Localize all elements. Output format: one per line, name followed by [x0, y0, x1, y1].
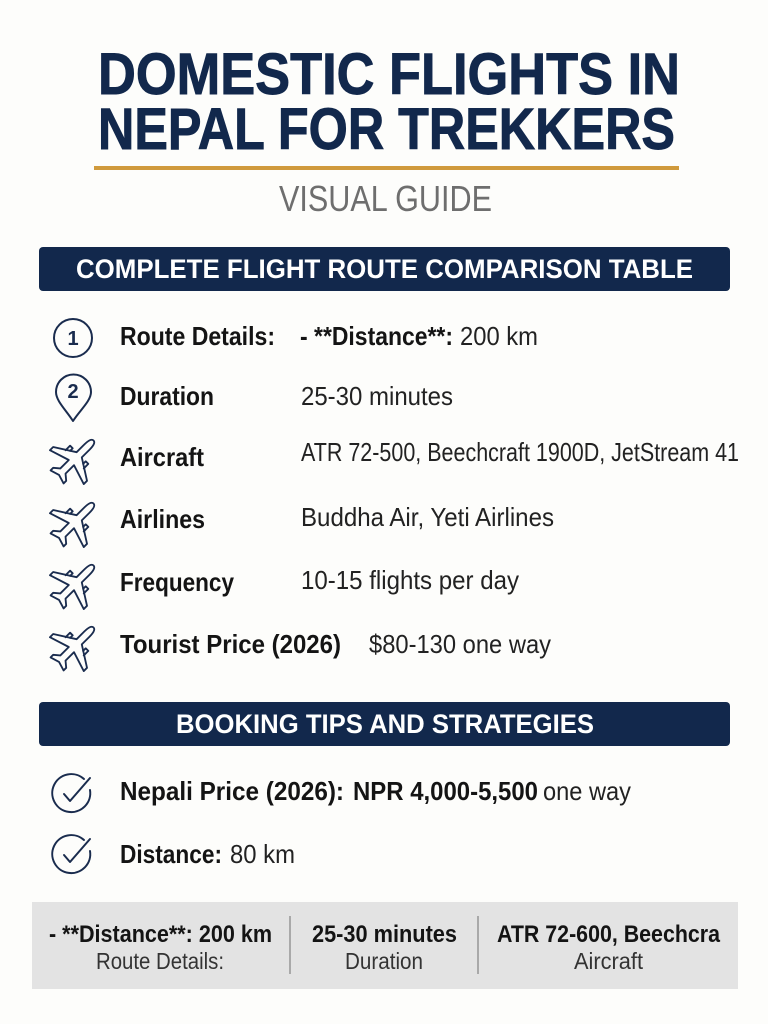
row: route details: 200 km — [460, 321, 538, 351]
icon: check circle — [52, 774, 90, 812]
icon: check circle — [52, 835, 90, 873]
section banner: booking tips: BOOKING TIPS AND STRATEGIES — [176, 709, 594, 739]
row: distance — [52, 835, 295, 873]
title: DOMESTIC FLIGHTS IN — [98, 42, 680, 107]
row: airlines — [40, 487, 554, 557]
stat: aircraft: ATR 72-600, Beechcra — [497, 921, 721, 948]
icon: numbered map pin 2 — [56, 374, 91, 421]
row: frequency — [40, 549, 519, 619]
row: tourist price: $80-130 one way — [369, 629, 551, 659]
row: aircraft — [40, 424, 739, 494]
row: nepali price: one way — [543, 776, 631, 806]
title: NEPAL FOR TREKKERS — [98, 97, 675, 162]
row: duration: 25-30 minutes — [301, 381, 453, 411]
section banner: flight route comparison: COMPLETE FLIGHT ROUTE COMPARISON TABLE — [76, 254, 693, 284]
row: nepali price: Nepali Price (2026): — [120, 776, 344, 806]
title — [98, 42, 680, 162]
icon: numbered circle 1: 1 — [67, 328, 79, 350]
row: nepali price: NPR 4,000-5,500 — [353, 776, 538, 806]
row: route details: Route Details: — [120, 321, 275, 351]
icon: airplane — [40, 487, 110, 557]
row: airlines: Buddha Air, Yeti Airlines — [301, 502, 554, 532]
row: duration: Duration — [120, 381, 214, 411]
icon: airplane — [40, 549, 110, 619]
stat: aircraft — [497, 921, 721, 974]
row: nepali price — [52, 774, 631, 812]
gold divider — [94, 166, 679, 170]
icon: airplane — [40, 424, 110, 494]
subtitle: VISUAL GUIDE — [279, 178, 492, 219]
row: route details — [54, 319, 538, 357]
stat: route details: - **Distance**: 200 km — [49, 921, 272, 948]
summary panel — [32, 902, 738, 989]
row: aircraft: Aircraft — [120, 442, 204, 472]
stat: route details: Route Details: — [96, 948, 224, 974]
stat: duration: 25-30 minutes — [312, 921, 457, 948]
section banner: booking tips — [39, 702, 730, 746]
row: duration — [56, 374, 453, 421]
row: route details: - **Distance**: — [300, 321, 453, 351]
icon: airplane — [40, 611, 110, 681]
stat: route details — [49, 921, 272, 974]
icon: numbered circle 1 — [54, 319, 92, 357]
row: distance: 80 km — [230, 839, 295, 869]
row: airlines: Airlines — [120, 504, 205, 534]
icon: numbered map pin 2: 2 — [67, 381, 79, 403]
stat: duration: Duration — [345, 948, 423, 974]
row: tourist price — [40, 611, 551, 681]
section banner: flight route comparison — [39, 247, 730, 291]
row: tourist price: Tourist Price (2026) — [120, 629, 341, 659]
stat: duration — [312, 921, 457, 974]
row: frequency: Frequency — [120, 567, 234, 597]
row: distance: Distance: — [120, 839, 222, 869]
row: frequency: 10-15 flights per day — [301, 565, 519, 595]
stat: aircraft: Aircraft — [574, 948, 644, 974]
